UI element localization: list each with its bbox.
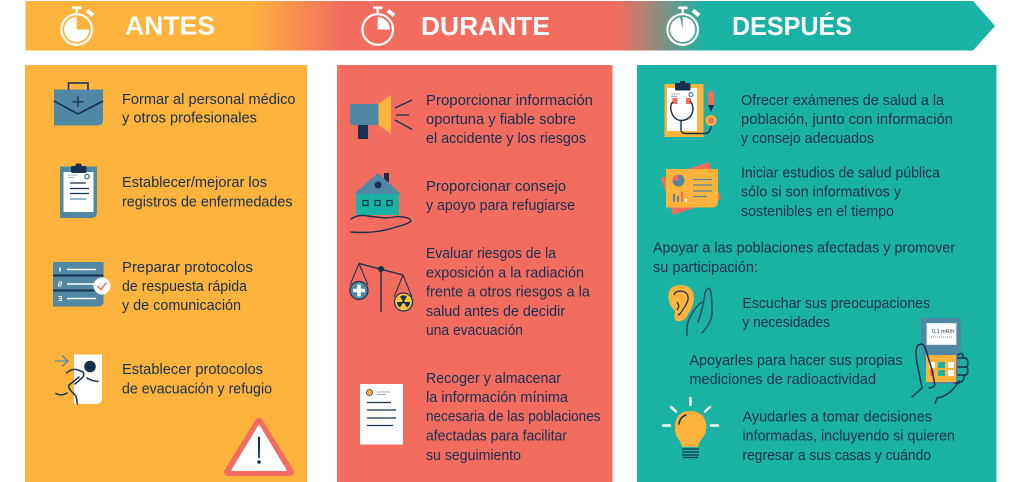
icon: balance scale (350, 264, 412, 312)
icon: house on hand (351, 173, 411, 232)
text: apoyar: su participación: (653, 259, 758, 276)
text: ayudarles: Ayudarles a tomar decisiones (742, 408, 932, 426)
text: preparar (122, 259, 253, 314)
text: preparar: Preparar protocolos (122, 259, 253, 276)
text: informacion: oportuna y fiable sobre (426, 111, 576, 128)
header arrow banner (26, 1, 995, 50)
text: ayudarles (742, 408, 955, 464)
icon: radiation meter in hand: 0,1 mR/h (932, 329, 954, 335)
icon: light bulb (663, 398, 718, 458)
text: recoger: necesaria de las poblaciones (426, 408, 600, 425)
text: establecer registros: Establecer/mejorar los (122, 174, 267, 191)
text: ayudarles: regresar a sus casas y cuándo (742, 447, 931, 464)
text: mediciones (690, 352, 902, 388)
text: recoger: Recoger y almacenar (426, 370, 561, 387)
heading: durante: DURANTE (421, 11, 550, 41)
text: recoger: la información mínima (426, 389, 569, 406)
text: apoyar: Apoyar a las poblaciones afectadas y promover (653, 240, 955, 256)
text: preparar: de respuesta rápida (122, 278, 248, 295)
text: examenes: población, junto con información (741, 111, 953, 128)
text: evaluar: salud antes de decidir (426, 303, 565, 320)
icon: clipboard and stethoscope (664, 81, 716, 137)
text: examenes: Ofrecer exámenes de salud a la (741, 92, 945, 109)
text: examenes (741, 92, 953, 147)
icon: stopwatch despues (667, 6, 700, 45)
text: recoger (426, 370, 600, 464)
text: escuchar (742, 295, 930, 331)
icon: stopwatch durante (362, 6, 395, 45)
text: formar: y otros profesionales (122, 110, 257, 126)
text: formar: Formar al personal médico (122, 91, 296, 108)
text: estudios: sólo si son informativos y (741, 184, 901, 200)
text: mediciones: mediciones de radioactividad (690, 371, 876, 388)
text: estudios: sostenibles en el tiempo (741, 203, 894, 220)
icon: stopwatch antes (61, 6, 94, 45)
text: informacion: el accidente y los riesgos (426, 130, 586, 147)
text: evaluar: exposición a la radiación (426, 264, 584, 282)
icon: report cards (661, 162, 721, 215)
text: evacuacion: de evacuación y refugio (122, 380, 272, 398)
text: consejo: Proporcionar consejo (426, 178, 566, 195)
text: examenes: y consejo adecuados (741, 130, 874, 147)
heading: despues: DESPUÉS (732, 11, 852, 41)
text: evacuacion: Establecer protocolos (122, 361, 263, 378)
icon: radiation meter in hand (912, 318, 968, 403)
text: recoger: su seguimiento (426, 447, 521, 464)
text: mediciones: Apoyarles para hacer sus propias (690, 352, 902, 369)
icon: ear and hand (668, 285, 712, 335)
text: recoger: afectadas para facilitar (426, 428, 567, 444)
panel: antes (25, 65, 307, 482)
text: escuchar: Escuchar sus preocupaciones (742, 295, 930, 312)
text: evaluar: frente a otros riesgos a la (426, 284, 591, 300)
text: informacion (426, 92, 593, 147)
icon: document (360, 384, 403, 444)
text: consejo (426, 178, 575, 214)
text: escuchar: y necesidades (742, 314, 830, 331)
text: apoyar (653, 240, 955, 276)
text: informacion: Proporcionar información (426, 92, 593, 109)
icon: evacuation (55, 354, 102, 404)
text: evaluar: Evaluar riesgos de la (426, 245, 557, 262)
panel: durante (337, 65, 612, 482)
text: evacuacion (122, 361, 272, 398)
icon: briefcase (54, 83, 103, 126)
icon: checklist (53, 262, 110, 306)
icon: warning triangle (228, 422, 290, 472)
icon: megaphone (350, 95, 412, 139)
text: estudios (741, 164, 941, 220)
text: evaluar: una evacuación (426, 322, 523, 339)
panel: despues (637, 65, 996, 482)
text: evaluar (426, 245, 591, 339)
text: establecer registros: registros de enfermedades (122, 194, 292, 210)
text: consejo: y apoyo para refugiarse (426, 197, 575, 214)
icon: clipboard (60, 164, 97, 218)
text: formar (122, 91, 296, 126)
text: estudios: Iniciar estudios de salud pública (741, 164, 941, 182)
text: preparar: y de comunicación (122, 297, 241, 314)
heading: antes: ANTES (125, 10, 215, 40)
text: establecer registros (122, 174, 292, 210)
text: ayudarles: informadas, incluyendo si quieren (742, 428, 955, 444)
